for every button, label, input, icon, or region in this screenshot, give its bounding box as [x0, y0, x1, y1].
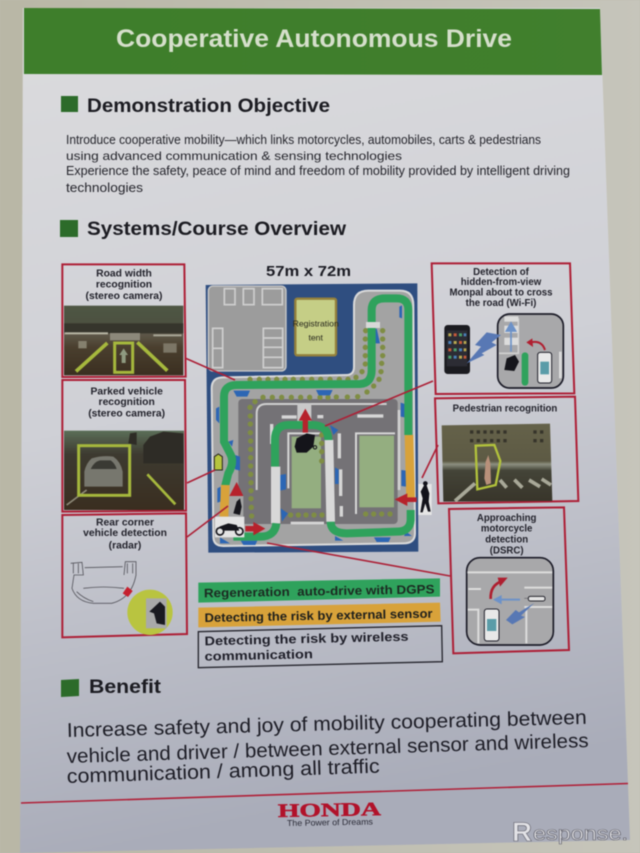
panel: approaching motorcycle detection: (DSRC)	[490, 545, 524, 556]
panel: road width recognition	[62, 264, 186, 377]
panel: pedestrian recognition	[435, 397, 578, 503]
panel: hidden-from-view Monpal detection	[432, 263, 574, 394]
footer divider	[21, 784, 628, 803]
panel: hidden-from-view Monpal detection: hidden-from-view	[461, 277, 542, 288]
icon: rider box	[229, 496, 243, 517]
panel: road width recognition: recognition	[96, 280, 152, 291]
icon: vehicle marker	[214, 454, 222, 470]
logo: Honda: HONDA	[278, 799, 381, 822]
right callouts	[432, 263, 578, 653]
panel: rear corner vehicle detection: vehicle detection	[83, 528, 167, 539]
panel: rear corner vehicle detection	[62, 513, 187, 637]
left callouts	[62, 264, 187, 637]
registration tent	[293, 299, 339, 355]
heading: Benefit	[61, 677, 162, 698]
heading: Demonstration Objective: Demonstration Objective	[87, 96, 330, 117]
panel: approaching motorcycle detection	[449, 507, 569, 653]
blue markers	[216, 305, 412, 545]
registration tent: tent	[308, 332, 323, 342]
text block: objective description: using advanced communication & sensing technologies	[66, 149, 402, 163]
registration tent: Registration	[293, 319, 339, 329]
legend: green regeneration auto-drive: Regeneration auto-drive with DGPS	[204, 582, 435, 600]
text block: objective description: Experience the safety, peace of mind and freedom of mobility provided by intelligent driving	[66, 164, 570, 178]
heading: Systems/Course Overview: Systems/Course Overview	[87, 219, 346, 240]
connector lines	[185, 358, 450, 576]
text block: objective description: technologies	[66, 181, 143, 195]
legend: wireless communication	[198, 626, 442, 668]
panel: road width recognition: Road width	[96, 269, 152, 280]
text block: benefit description	[66, 707, 589, 788]
legend: wireless communication: Detecting the risk by wireless	[204, 630, 409, 648]
watermark: Response	[512, 817, 628, 847]
text block: benefit description: vehicle and driver / between external sensor and wireless	[66, 730, 589, 768]
panel: parked vehicle recognition: recognition	[99, 397, 155, 408]
panel: pedestrian recognition: Pedestrian recognition	[453, 404, 557, 415]
panel: rear corner vehicle detection: (radar)	[109, 540, 141, 551]
text block: benefit description: Increase safety and joy of mobility cooperating between	[67, 707, 587, 742]
arrow: up to cart	[299, 409, 312, 433]
course map	[206, 283, 432, 553]
panel: hidden-from-view Monpal detection: Detection of	[473, 267, 530, 278]
icon: motorcycle	[215, 517, 244, 537]
panel: hidden-from-view Monpal detection: the road (Wi-Fi)	[466, 298, 536, 309]
icon: pedestrian	[418, 481, 432, 515]
panel: approaching motorcycle detection: motorcycle	[481, 524, 533, 535]
panel: rear corner vehicle detection: Rear corner	[96, 518, 154, 529]
panel: approaching motorcycle detection: detection	[485, 534, 528, 545]
arrow: left from pedestrian	[395, 493, 417, 506]
watermark: Response: R	[512, 817, 532, 847]
legend: wireless communication: communication	[204, 647, 313, 664]
route: regeneration auto-drive	[224, 298, 411, 537]
title banner	[24, 8, 602, 75]
arrow: up at rider	[229, 482, 243, 496]
text block: objective description	[66, 133, 570, 195]
icon: cart on course	[295, 433, 317, 453]
course size label: 57m x 72m	[266, 264, 351, 280]
panel: hidden-from-view Monpal detection: Monpal about to cross	[449, 288, 553, 299]
panel: parked vehicle recognition: (stereo camera)	[88, 409, 165, 420]
legend	[198, 578, 442, 668]
panel: parked vehicle recognition: Parked vehicle	[90, 386, 163, 397]
legend: orange external sensor: Detecting the risk by external sensor	[204, 607, 433, 625]
parking lot	[208, 286, 286, 371]
arrow: right from motorcycle	[245, 522, 265, 535]
inner road block	[238, 399, 399, 524]
watermark: Response: esponse.	[533, 824, 628, 845]
panel: approaching motorcycle detection: Approaching	[477, 513, 537, 524]
panel: road width recognition: (stereo camera)	[86, 291, 162, 302]
road surface	[212, 291, 415, 546]
legend: green regeneration auto-drive	[198, 578, 440, 603]
logo: Honda	[278, 799, 381, 828]
roadside trees	[247, 328, 393, 519]
panel: parked vehicle recognition	[62, 380, 186, 512]
logo: Honda: The Power of Dreams	[287, 817, 373, 828]
title banner: Cooperative Autonomous Drive	[116, 25, 512, 53]
heading: Benefit: Benefit	[89, 677, 162, 698]
text block: benefit description: communication / among all traffic	[66, 756, 380, 788]
text block: objective description: Introduce cooperative mobility—which links motorcycles, automobiles, carts & pedestrians	[66, 133, 541, 147]
legend: orange external sensor	[198, 603, 441, 627]
